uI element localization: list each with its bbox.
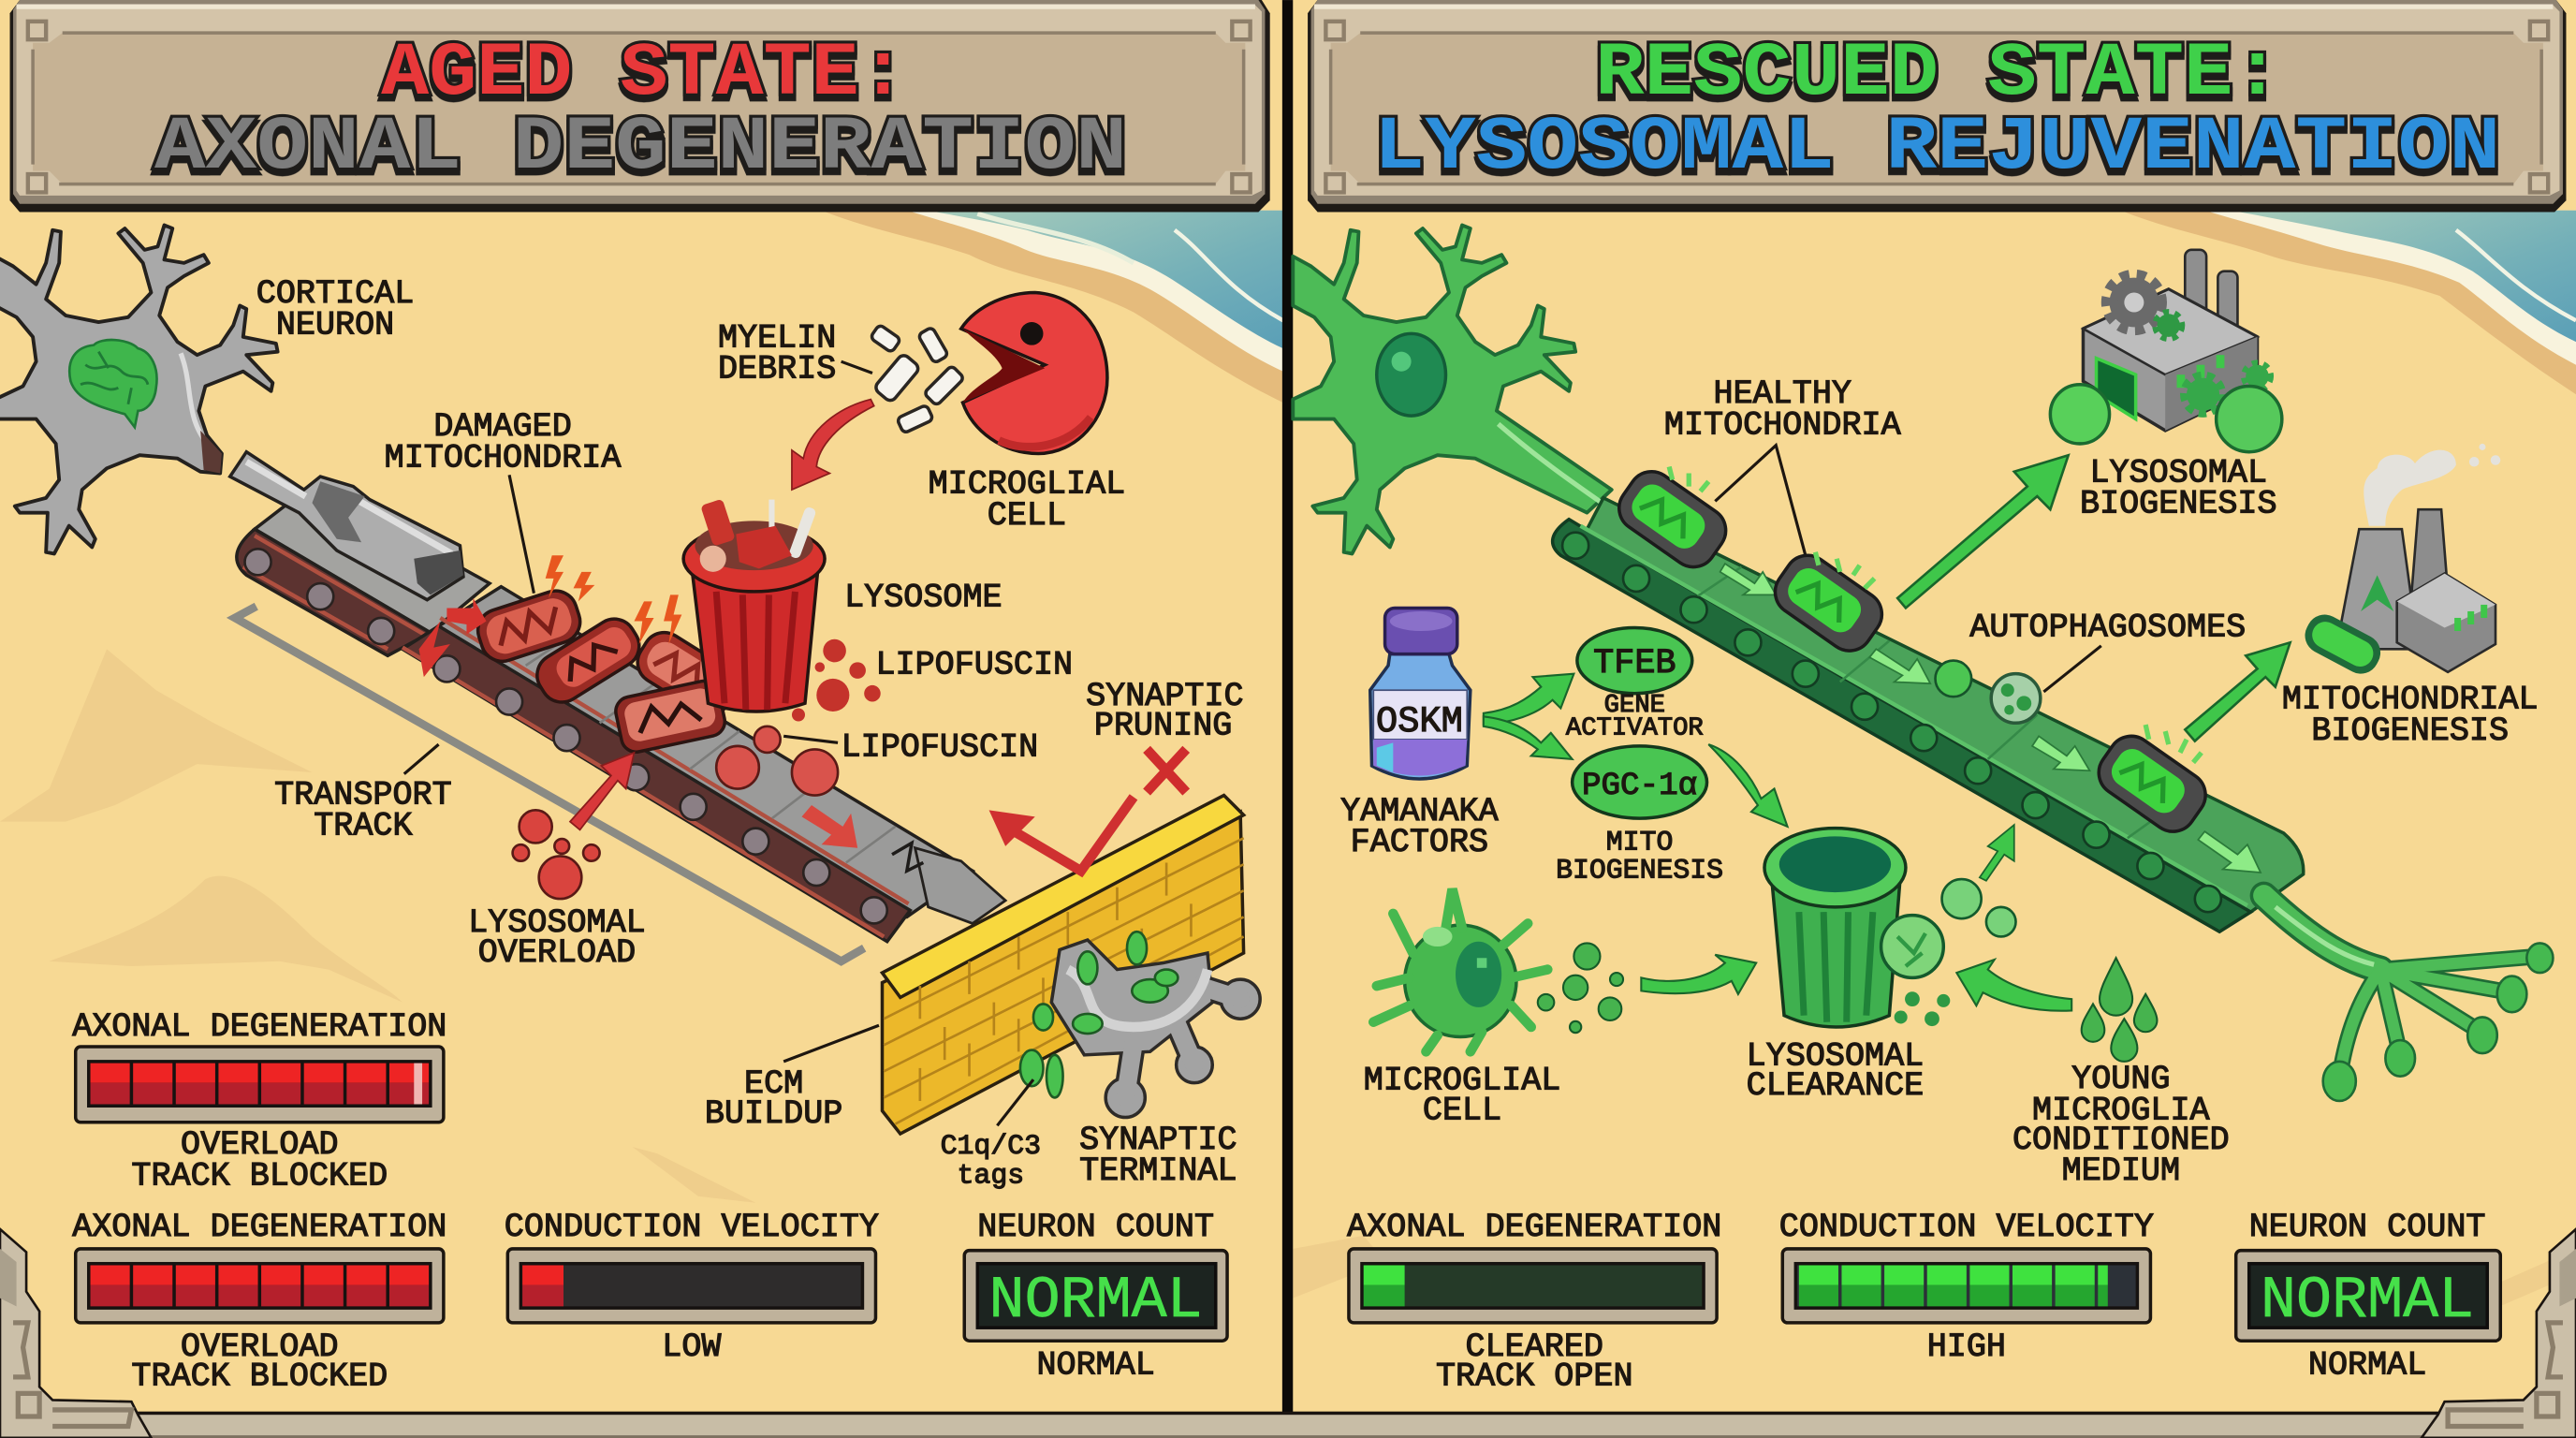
- gears green: [2157, 314, 2180, 337]
- arrow: pruning redirect: [1009, 797, 1134, 871]
- broken axon stub end: [915, 848, 1005, 923]
- icon: ECM brick wall: [882, 796, 1244, 1134]
- icon: red x: [1147, 749, 1186, 792]
- label: cortical neuron: NEURON: [276, 306, 394, 344]
- arrow: spheres to belt: [1980, 825, 2014, 881]
- bottle label text: OSKM: [1376, 701, 1463, 742]
- label: lysosomal biogenesis: BIOGENESIS: [2080, 486, 2277, 523]
- label: microglial cell right: MICROGLIAL: [1364, 1063, 1560, 1100]
- label: damaged mitochondria: [385, 408, 622, 594]
- gauge: axonal degeneration upper: AXONAL DEGENERATION: [72, 1008, 446, 1046]
- icon: green lysosome bin: [1764, 829, 1906, 1027]
- gauge: conduction velocity low: CONDUCTION VELOCITY: [505, 1209, 879, 1246]
- icon: broken axon tube: [230, 452, 463, 600]
- title: aged state: AXONAL DEGENERATION: [154, 106, 1127, 191]
- icon: healthy mitochondria capsules: [1610, 462, 2215, 841]
- arrows: oskm to tfeb and pgc: [1484, 674, 1573, 759]
- divider: [1282, 0, 1293, 1416]
- label: lysosomal overload: OVERLOAD: [478, 934, 636, 972]
- plaque corner ornaments: [1325, 22, 2548, 192]
- sand dunes: [1293, 1236, 2576, 1314]
- icon: lysosomal overload dots: [513, 810, 600, 899]
- label: lipofuscin lower: LIPOFUSCIN: [842, 728, 1038, 766]
- label: ecm buildup: BUILDUP: [705, 1095, 842, 1133]
- gauge: conduction velocity high: [1779, 1209, 2154, 1366]
- panel: rescued state background: [1293, 0, 2576, 1438]
- icon: healthy neuron green: [1293, 226, 1612, 554]
- label: cortical neuron: CORTICAL: [256, 275, 414, 313]
- gauge: neuron count aged: NORMAL: [1036, 1346, 1155, 1384]
- label: lipofuscin upper: LIPOFUSCIN: [875, 647, 1073, 684]
- gauge: conduction velocity high: HIGH: [1927, 1328, 2006, 1366]
- icon: debris particles: [1538, 943, 1623, 1033]
- icon: lysosomal factory: [2050, 250, 2282, 452]
- label: mitochondrial biogenesis: MITOCHONDRIAL: [2282, 682, 2539, 719]
- header plaque: rescued state: [1308, 0, 2566, 212]
- sparks: [546, 555, 681, 644]
- arrow: microglia to bin: [1641, 955, 1756, 994]
- gauge: axonal degeneration cleared: CLEARED: [1466, 1328, 1603, 1366]
- label: damaged mitochondria: DAMAGED: [433, 408, 572, 446]
- label: c1q/c3 tags: tags: [958, 1160, 1024, 1192]
- icon: small dots: [1895, 991, 1950, 1026]
- label: myelin debris: DEBRIS: [718, 351, 836, 389]
- gauge: axonal degeneration upper: TRACK BLOCKED: [131, 1157, 388, 1195]
- glow ticks: [1669, 467, 2202, 762]
- label: healthy mitochondria: [1664, 375, 1902, 555]
- arrow: overload to belt: [570, 753, 634, 829]
- label: young microglia conditioned medium: MEDIUM: [2062, 1152, 2180, 1190]
- arrow: to lysosomal biogenesis: [1897, 455, 2069, 608]
- title: rescued state: RESCUED STATE:: [1595, 32, 2282, 117]
- icon: lipofuscin dots near bin: [792, 639, 881, 722]
- icon: oskm bottle: [1370, 608, 1471, 779]
- label: damaged mitochondria: MITOCHONDRIA: [385, 440, 622, 477]
- belt arrows: [1720, 564, 2261, 873]
- corner ornament right: [2422, 1229, 2576, 1438]
- conveyor: aged belt: [237, 485, 1005, 942]
- gauge: conduction velocity low: [505, 1209, 879, 1366]
- gauge: axonal degeneration lower: [72, 1209, 446, 1396]
- label: synaptic terminal: SYNAPTIC: [1079, 1122, 1237, 1159]
- label: gene activator: GENE: [1604, 691, 1665, 720]
- transport track rail: [235, 607, 864, 961]
- label: synaptic pruning: PRUNING: [1094, 708, 1232, 745]
- label: mito biogenesis: MITO: [1606, 826, 1673, 858]
- plaque corner ornaments: [28, 22, 1251, 192]
- label: young microglia conditioned medium: CONDITIONED: [2012, 1122, 2230, 1159]
- icon: cortical neuron grey: [0, 226, 278, 554]
- smoke: [2364, 444, 2500, 526]
- icon: glowing spheres: [1881, 879, 2016, 977]
- title: rescued state: [1373, 32, 2500, 191]
- gauge: axonal degeneration cleared: [1347, 1209, 1721, 1396]
- label: transport track: [274, 744, 452, 845]
- label: gene activator: ACTIVATOR: [1566, 714, 1704, 743]
- belt direction arrow: [801, 805, 857, 848]
- gauge: axonal degeneration lower: TRACK BLOCKED: [131, 1358, 388, 1396]
- label: synaptic terminal: TERMINAL: [1079, 1152, 1237, 1190]
- icon: autophagosomes: [1936, 661, 2041, 723]
- label: autophagosomes: [1969, 609, 2246, 692]
- icon: myelin debris: [870, 324, 964, 433]
- icon: lysosome red bin: [683, 499, 825, 712]
- label: c1q/c3 tags: [941, 1079, 1041, 1192]
- icon: synaptic terminal: [1020, 932, 1260, 1118]
- gauge: conduction velocity low: LOW: [662, 1328, 722, 1366]
- label: yamanaka factors: FACTORS: [1351, 824, 1488, 861]
- arrow: to mitochondrial biogenesis: [2185, 642, 2291, 741]
- arrow: medium to bin: [1956, 960, 2071, 1011]
- label: young microglia conditioned medium: YOUNG: [2071, 1061, 2170, 1098]
- icon: pgc oval: PGC-1α: [1582, 769, 1697, 804]
- title: aged state: [154, 32, 1127, 191]
- gear grey: [2110, 278, 2159, 327]
- label: lysosomal clearance: CLEARANCE: [1747, 1067, 1924, 1105]
- label: c1q/c3 tags: C1q/C3: [941, 1130, 1041, 1162]
- icon: lipofuscin on belt: [716, 726, 838, 796]
- nucleus: [1377, 333, 1445, 416]
- green tags: [1020, 932, 1178, 1097]
- label: microglial cell right: CELL: [1423, 1092, 1501, 1129]
- panel: aged state background: [0, 0, 1283, 1438]
- gauge: neuron count rescued: NEURON COUNT: [2249, 1209, 2485, 1246]
- label: ecm buildup: [705, 1025, 879, 1133]
- label: lysosomal overload: LYSOSOMAL: [468, 904, 646, 942]
- gauge: neuron count aged: NEURON COUNT: [977, 1209, 1214, 1246]
- sand dunes: [0, 649, 755, 1203]
- icon: pgc oval: [1573, 746, 1707, 818]
- gauge: axonal degeneration lower: OVERLOAD: [181, 1328, 339, 1366]
- label: myelin debris: [718, 319, 872, 389]
- gauge: neuron count rescued: [2236, 1209, 2500, 1384]
- label: autophagosomes: AUTOPHAGOSOMES: [1969, 609, 2246, 646]
- label: myelin debris: MYELIN: [718, 319, 836, 357]
- gauge: axonal degeneration cleared: TRACK OPEN: [1436, 1358, 1633, 1396]
- gauge: neuron count rescued: NORMAL: [2308, 1346, 2426, 1384]
- gauge: neuron count aged: NORMAL: [989, 1267, 1203, 1334]
- gauge: axonal degeneration cleared: AXONAL DEGENERATION: [1347, 1209, 1721, 1246]
- gauge: conduction velocity high: CONDUCTION VELOCITY: [1779, 1209, 2154, 1246]
- label: healthy mitochondria: MITOCHONDRIA: [1664, 406, 1902, 444]
- label: transport track: TRANSPORT: [274, 776, 452, 814]
- icon: mitochondrial factory: [2299, 444, 2500, 680]
- label: mito biogenesis: BIOGENESIS: [1556, 854, 1723, 886]
- label: microglial cell: CELL: [988, 497, 1066, 535]
- beach water top right left panel: [822, 211, 1283, 403]
- icon: damaged mitochondria: [419, 555, 744, 755]
- red push arrows: [419, 598, 487, 677]
- header plaque: aged state: [10, 0, 1270, 212]
- wheels: [245, 549, 887, 923]
- label: ecm buildup: ECM: [744, 1065, 803, 1103]
- wheels: [1562, 533, 2221, 912]
- title: rescued state: LYSOSOMAL REJUVENATION: [1373, 106, 2500, 191]
- arrow: debris into lysosome: [792, 400, 874, 490]
- label: microglial cell: MICROGLIAL: [929, 466, 1125, 504]
- gauge: neuron count rescued: NORMAL: [2261, 1267, 2474, 1334]
- corner ornament left: [0, 1229, 151, 1438]
- label: yamanaka factors: YAMANAKA: [1340, 793, 1500, 830]
- icon: axon terminal: [2264, 896, 2553, 1101]
- label: lysosome: LYSOSOME: [844, 580, 1003, 617]
- label: young microglia conditioned medium: MICROGLIA: [2032, 1092, 2211, 1129]
- label: lysosomal biogenesis: LYSOSOMAL: [2089, 454, 2267, 492]
- gauge: neuron count aged: [964, 1209, 1227, 1384]
- icon: microglial cell green: [1373, 889, 1547, 1051]
- arrow: pgc to lysosome: [1708, 744, 1788, 827]
- gauge: axonal degeneration lower: AXONAL DEGENERATION: [72, 1209, 446, 1246]
- icon: microglial cell pacman red: [961, 292, 1107, 453]
- icon: medium droplets: [2082, 958, 2157, 1062]
- gauge: axonal degeneration upper: OVERLOAD: [181, 1126, 339, 1164]
- label: mitochondrial biogenesis: BIOGENESIS: [2311, 712, 2509, 750]
- label: lysosomal clearance: LYSOSOMAL: [1747, 1037, 1924, 1075]
- conveyor: healthy belt: [1553, 498, 2304, 932]
- icon: tfeb oval: TFEB: [1593, 644, 1676, 683]
- title: aged state: AGED STATE:: [381, 32, 907, 117]
- gauge: axonal degeneration upper: [72, 1008, 446, 1195]
- label: transport track: TRACK: [314, 808, 413, 845]
- beach water top right right panel: [2121, 211, 2576, 394]
- label: synaptic pruning: SYNAPTIC: [1086, 678, 1244, 715]
- bottom frame: [0, 1412, 2576, 1438]
- icon: brain: [69, 340, 157, 427]
- arrowhead: [989, 810, 1035, 846]
- label: healthy mitochondria: HEALTHY: [1714, 375, 1852, 413]
- icon: tfeb oval: [1577, 628, 1692, 694]
